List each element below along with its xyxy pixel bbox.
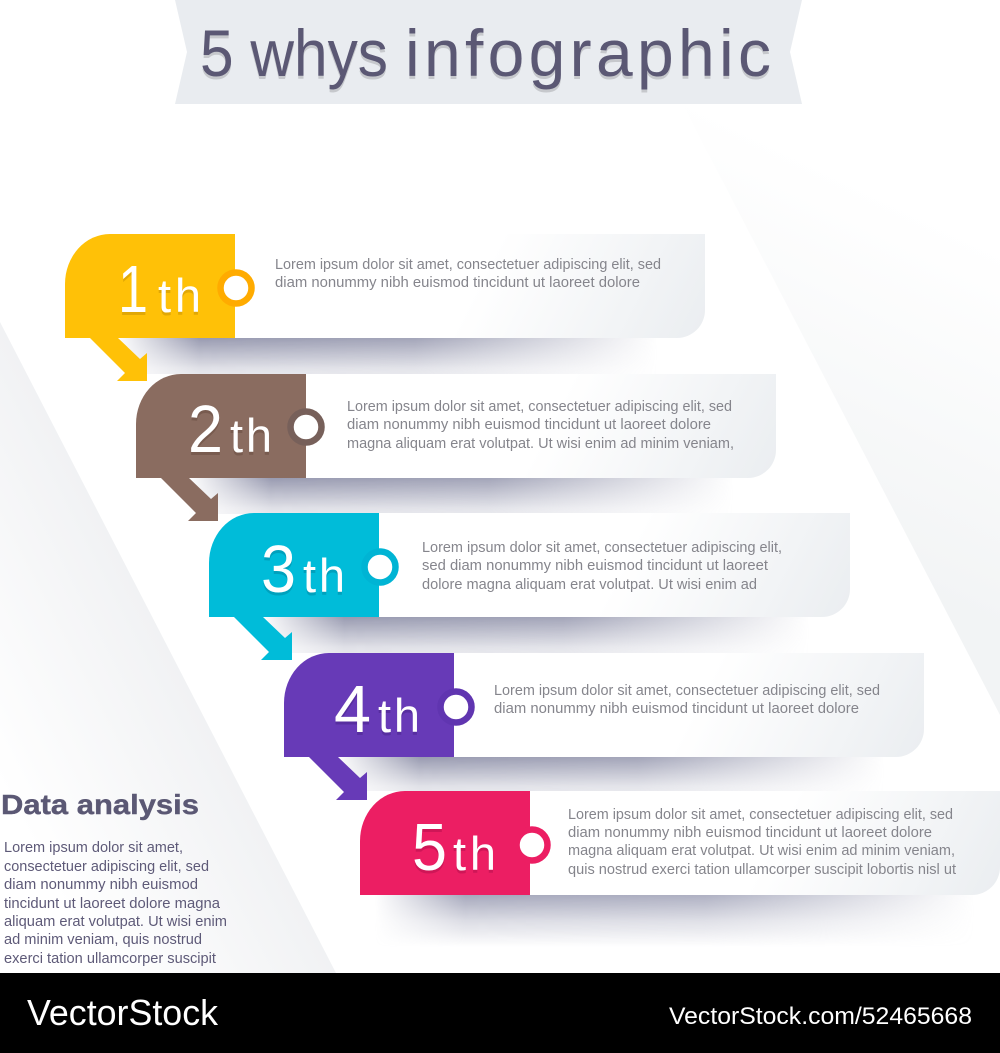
card body 2 xyxy=(306,374,776,478)
text block: data analysis: tincidunt ut laoreet dolore magna xyxy=(4,896,221,912)
text block: data analysis: ad minim veniam, quis nostrud xyxy=(4,932,202,948)
card body 5 xyxy=(530,791,1000,895)
colour tab 2 xyxy=(136,374,306,478)
colour tab 4 xyxy=(284,653,454,757)
connector ring 4 xyxy=(440,692,472,722)
text block 4 xyxy=(494,683,880,717)
text block 5: Lorem ipsum dolor sit amet, consectetuer adipiscing elit, sed xyxy=(568,807,953,823)
number 1 xyxy=(118,252,201,327)
shadow under card 4 xyxy=(337,757,885,791)
text block 3 xyxy=(422,540,782,593)
arrow 3 xyxy=(234,617,292,660)
shadow under card 5 xyxy=(384,895,948,942)
number 2: th xyxy=(230,409,272,462)
text block: data analysis: aliquam erat volutpat. Ut wisi enim xyxy=(4,914,227,930)
number 2: 2 xyxy=(188,392,223,467)
background panel: right diagonal xyxy=(683,105,1000,715)
text block: data analysis: consectetuer adipiscing elit, sed xyxy=(4,859,209,875)
panel: step 4 xyxy=(284,653,924,800)
text block 5: magna aliquam erat volutpat. Ut wisi enim ad minim veniam, xyxy=(568,843,955,859)
text block: data analysis: exerci tation ullamcorper suscipit xyxy=(4,951,216,967)
text block 5: quis nostrud exerci tation ullamcorper suscipit lobortis nisl ut xyxy=(568,862,956,878)
number 2 xyxy=(188,392,272,467)
text block 4: Lorem ipsum dolor sit amet, consectetuer adipiscing elit, sed xyxy=(494,683,880,699)
text block 4: diam nonummy nibh euismod tincidunt ut laoreet dolore xyxy=(494,701,859,717)
arrow 4 xyxy=(309,757,367,800)
text block 3: Lorem ipsum dolor sit amet, consectetuer adipiscing elit, xyxy=(422,540,782,556)
connector ring 3 xyxy=(364,552,396,582)
text block 3: sed diam nonummy nibh euismod tincidunt ut laoreet xyxy=(422,558,768,574)
text block 2: diam nonummy nibh euismod tincidunt ut laoreet dolore xyxy=(347,417,711,433)
connector ring 5 xyxy=(516,830,548,860)
footer url: VectorStock.com/52465668 xyxy=(669,1003,972,1030)
text block 5 xyxy=(568,807,956,878)
panel: step 5 xyxy=(360,791,1000,895)
number 3: th xyxy=(303,549,345,602)
text block: data analysis: diam nonummy nibh euismod xyxy=(4,877,198,893)
panel: step 3 xyxy=(209,513,850,660)
number 4: th xyxy=(378,689,420,742)
number 3 xyxy=(261,532,345,607)
number 5 xyxy=(412,810,496,885)
panel: step 1 xyxy=(65,234,705,381)
text block 1 xyxy=(275,257,661,291)
card body 1 xyxy=(235,234,705,338)
text block 2: Lorem ipsum dolor sit amet, consectetuer adipiscing elit, sed xyxy=(347,399,732,415)
title: infographic xyxy=(405,16,771,90)
footer logo: VectorStock xyxy=(27,992,219,1033)
shadow under card 1 xyxy=(118,338,658,374)
arrow 2 xyxy=(161,478,218,521)
text block 2 xyxy=(347,399,734,452)
title: 5 whys xyxy=(200,16,388,90)
text block 5: diam nonummy nibh euismod tincidunt ut laoreet dolore xyxy=(568,825,932,841)
shadow under card 3 xyxy=(262,617,810,653)
number 5: th xyxy=(453,827,496,880)
colour tab 3 xyxy=(209,513,379,617)
number 1: th xyxy=(158,269,201,322)
connector ring 1 xyxy=(220,272,252,304)
text block: data analysis xyxy=(4,840,227,967)
card body 4 xyxy=(454,653,924,757)
arrow 1 xyxy=(90,338,147,381)
number 1: 1 xyxy=(118,252,148,327)
heading: Data analysis: Data analysis xyxy=(1,789,199,820)
number 5: 5 xyxy=(412,810,447,885)
connector ring 2 xyxy=(290,412,322,442)
text block: data analysis: Lorem ipsum dolor sit amet, xyxy=(4,840,183,856)
footer bar xyxy=(0,973,1000,1053)
text block 1: Lorem ipsum dolor sit amet, consectetuer adipiscing elit, sed xyxy=(275,257,661,273)
colour tab 1 xyxy=(65,234,235,338)
number 4: 4 xyxy=(334,672,371,747)
card body 3 xyxy=(379,513,850,617)
colour tab 5 xyxy=(360,791,530,895)
panel: step 2 xyxy=(136,374,776,521)
title xyxy=(200,16,771,90)
text block 2: magna aliquam erat volutpat. Ut wisi enim ad minim veniam, xyxy=(347,436,734,452)
number 3: 3 xyxy=(261,532,296,607)
background panel: left diagonal xyxy=(0,322,336,973)
text block 1: diam nonummy nibh euismod tincidunt ut laoreet dolore xyxy=(275,275,640,291)
shadow under card 2 xyxy=(189,478,734,514)
text block 3: dolore magna aliquam erat volutpat. Ut wisi enim ad xyxy=(422,577,757,593)
title banner xyxy=(175,0,802,104)
number 4 xyxy=(334,672,420,747)
